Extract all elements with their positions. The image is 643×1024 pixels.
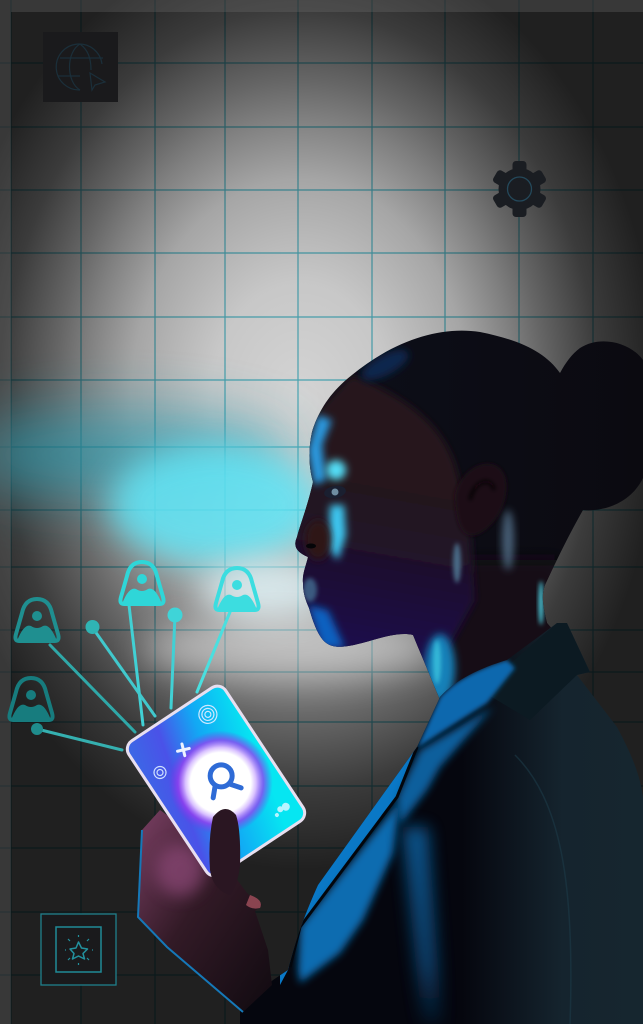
shoulder highlight [397, 707, 493, 825]
lapel highlight [417, 660, 515, 748]
network connector lines [37, 605, 230, 750]
cyan glow behind the face [0, 410, 330, 618]
card corner mark [272, 801, 291, 818]
ear [455, 464, 507, 535]
black lapel seam [290, 747, 417, 967]
light haze band under the glow [140, 620, 440, 680]
glowing card [123, 682, 309, 880]
icon: person pin top centre [120, 562, 164, 604]
icon: person pin left [15, 599, 59, 641]
card small badge top [195, 702, 220, 727]
icon: person pin top right [215, 568, 259, 610]
icon: person pin lower left [9, 678, 53, 720]
card search-person icon [210, 765, 241, 798]
head, neck and hair [295, 330, 643, 698]
front panel highlight [280, 747, 417, 985]
card sparkle [176, 743, 191, 757]
card purple glow [170, 732, 272, 832]
hand holding the card [138, 810, 272, 1012]
icon: globe with cursor [43, 32, 118, 102]
lower front highlight [298, 800, 400, 983]
jacket [240, 620, 643, 1024]
jacket collar [494, 623, 590, 702]
card small badge left [152, 764, 168, 781]
icon: star badge [41, 914, 116, 985]
person: woman in profile [240, 320, 643, 1024]
sleeve highlight [402, 827, 442, 1024]
sleeve fold [515, 755, 571, 1024]
icon: gear [492, 161, 547, 217]
node dots [31, 608, 182, 735]
thumb [209, 809, 240, 895]
eye [323, 484, 347, 500]
